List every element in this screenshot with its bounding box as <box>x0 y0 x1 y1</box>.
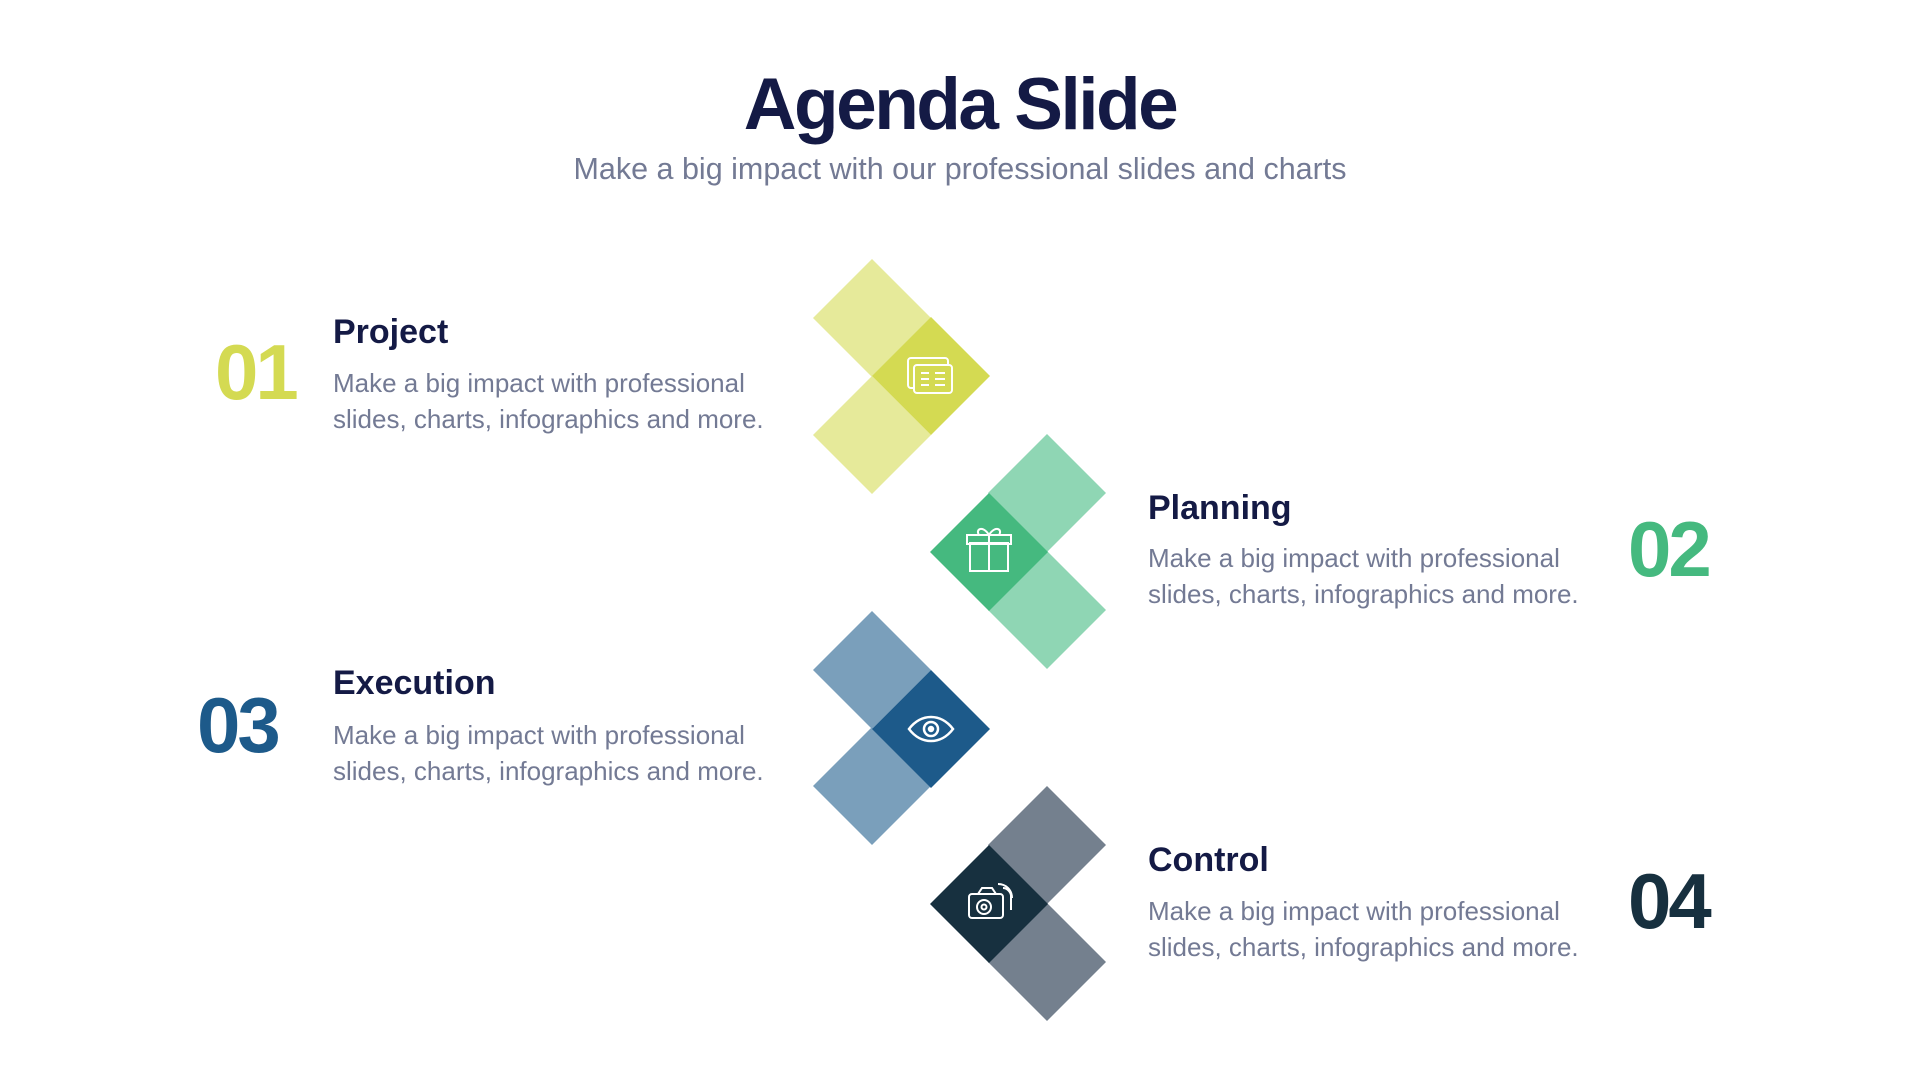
text: 02 <box>1628 505 1709 593</box>
text: Make a big impact with professional <box>1148 896 1560 926</box>
text: 03 <box>197 681 278 769</box>
diamond group 2 <box>930 434 1106 669</box>
text: 04 <box>1628 857 1709 945</box>
text: slides, charts, infographics and more. <box>333 756 764 786</box>
item 01 <box>215 313 764 434</box>
text: slides, charts, infographics and more. <box>1148 579 1579 609</box>
text: Make a big impact with professional <box>333 720 745 750</box>
diamond group 3 <box>813 611 990 845</box>
text: Make a big impact with professional <box>1148 543 1560 573</box>
item 03 <box>197 664 764 786</box>
text: Project <box>333 313 448 351</box>
title: Agenda Slide <box>744 64 1176 145</box>
text: slides, charts, infographics and more. <box>333 404 764 434</box>
item 02 <box>1148 489 1709 609</box>
diamond group 4 <box>930 786 1106 1021</box>
text: slides, charts, infographics and more. <box>1148 932 1579 962</box>
text: Execution <box>333 664 495 702</box>
diamond group 1 <box>813 259 990 494</box>
text: Planning <box>1148 489 1292 527</box>
text: Control <box>1148 841 1269 879</box>
text: Make a big impact with professional <box>333 368 745 398</box>
text: 01 <box>215 328 296 416</box>
item 04 <box>1148 841 1712 962</box>
subtitle: Make a big impact with our professional slides and charts <box>573 152 1347 186</box>
